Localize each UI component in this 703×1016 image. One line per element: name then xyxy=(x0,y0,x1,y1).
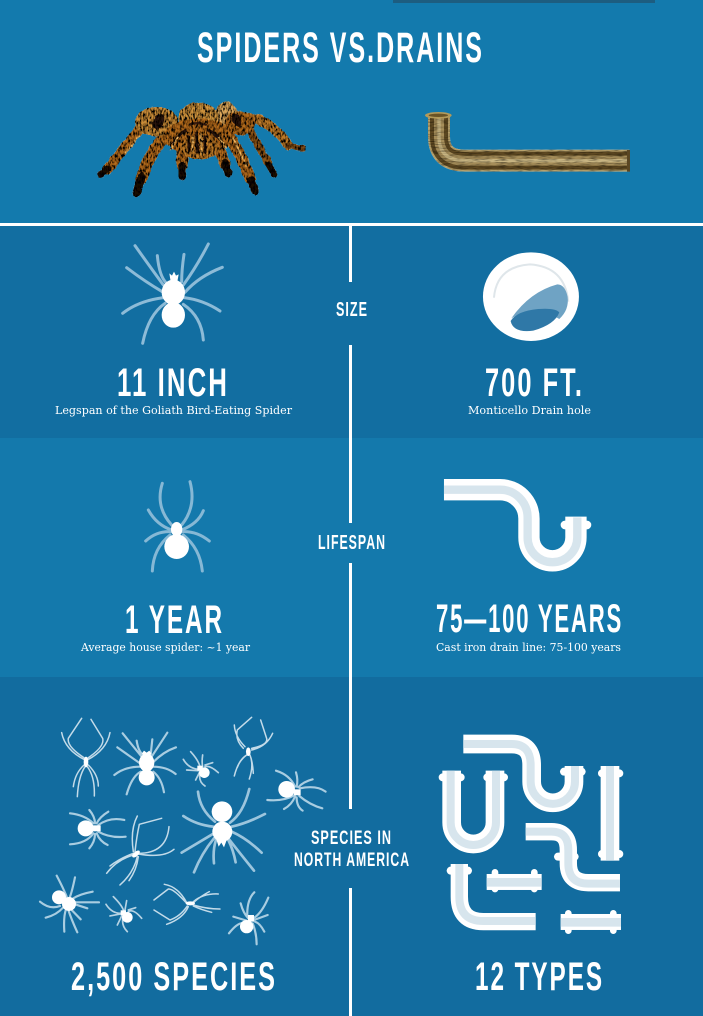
label: lifespan: LIFESPAN xyxy=(318,532,386,554)
label: species in north america xyxy=(294,828,410,871)
spider 9 xyxy=(40,876,99,932)
spider 5 xyxy=(267,771,326,811)
label: species in north america: SPECIES IN xyxy=(311,828,392,849)
value: 2,500 species: 2,500 SPECIES xyxy=(71,955,277,999)
spider 1 xyxy=(62,718,110,797)
icon group: many spiders xyxy=(40,717,326,944)
pipe b xyxy=(443,771,504,845)
caption: monticello: Monticello Drain hole xyxy=(468,404,591,417)
title: SPIDERS VS.DRAINS xyxy=(197,24,484,72)
icon: house spider xyxy=(146,482,209,571)
spider 2 xyxy=(114,733,176,794)
label: species in north america: NORTH AMERICA xyxy=(294,850,410,871)
label: size: SIZE xyxy=(336,299,368,321)
icon: goliath spider xyxy=(123,244,222,343)
spider 8 xyxy=(107,816,174,885)
caption: cast iron: Cast iron drain line: 75-100 years xyxy=(436,641,621,654)
value: 1 year: 1 YEAR xyxy=(125,598,224,642)
icon: drain hole xyxy=(483,252,579,341)
spider 12 xyxy=(229,892,268,944)
pipe f xyxy=(487,872,542,890)
spider 7 xyxy=(70,810,126,848)
icon: p-trap pipe xyxy=(444,490,587,562)
pipe a xyxy=(463,744,582,804)
image: tarantula xyxy=(101,101,303,193)
caption: house spider: Average house spider: ~1 year xyxy=(80,641,251,654)
panel: lifespan row xyxy=(0,438,703,677)
pipe g xyxy=(561,913,621,931)
caption: goliath spider: Legspan of the Goliath Bird-Eating Spider xyxy=(55,404,293,417)
icon group: pipe types xyxy=(443,744,621,931)
top navigation bar xyxy=(393,0,655,3)
spider 6: large xyxy=(182,789,265,872)
spider 4 xyxy=(234,717,273,779)
spider 3 xyxy=(183,752,218,786)
pipe d xyxy=(526,832,620,884)
spider 11 xyxy=(154,884,220,924)
panel: species row xyxy=(0,677,703,1016)
value: 11 inch: 11 INCH xyxy=(117,361,229,405)
panel: size row xyxy=(0,226,703,438)
center vertical divider xyxy=(349,226,352,1016)
image: copper drain pipe xyxy=(425,112,630,172)
spider 10 xyxy=(106,897,142,932)
value: 12 types: 12 TYPES xyxy=(475,955,604,999)
value: 700 ft: 700 FT. xyxy=(485,361,584,405)
background: header band xyxy=(0,0,703,223)
pipe c xyxy=(602,766,619,861)
divider: horizontal white rule xyxy=(0,223,703,226)
pipe e xyxy=(451,864,536,922)
